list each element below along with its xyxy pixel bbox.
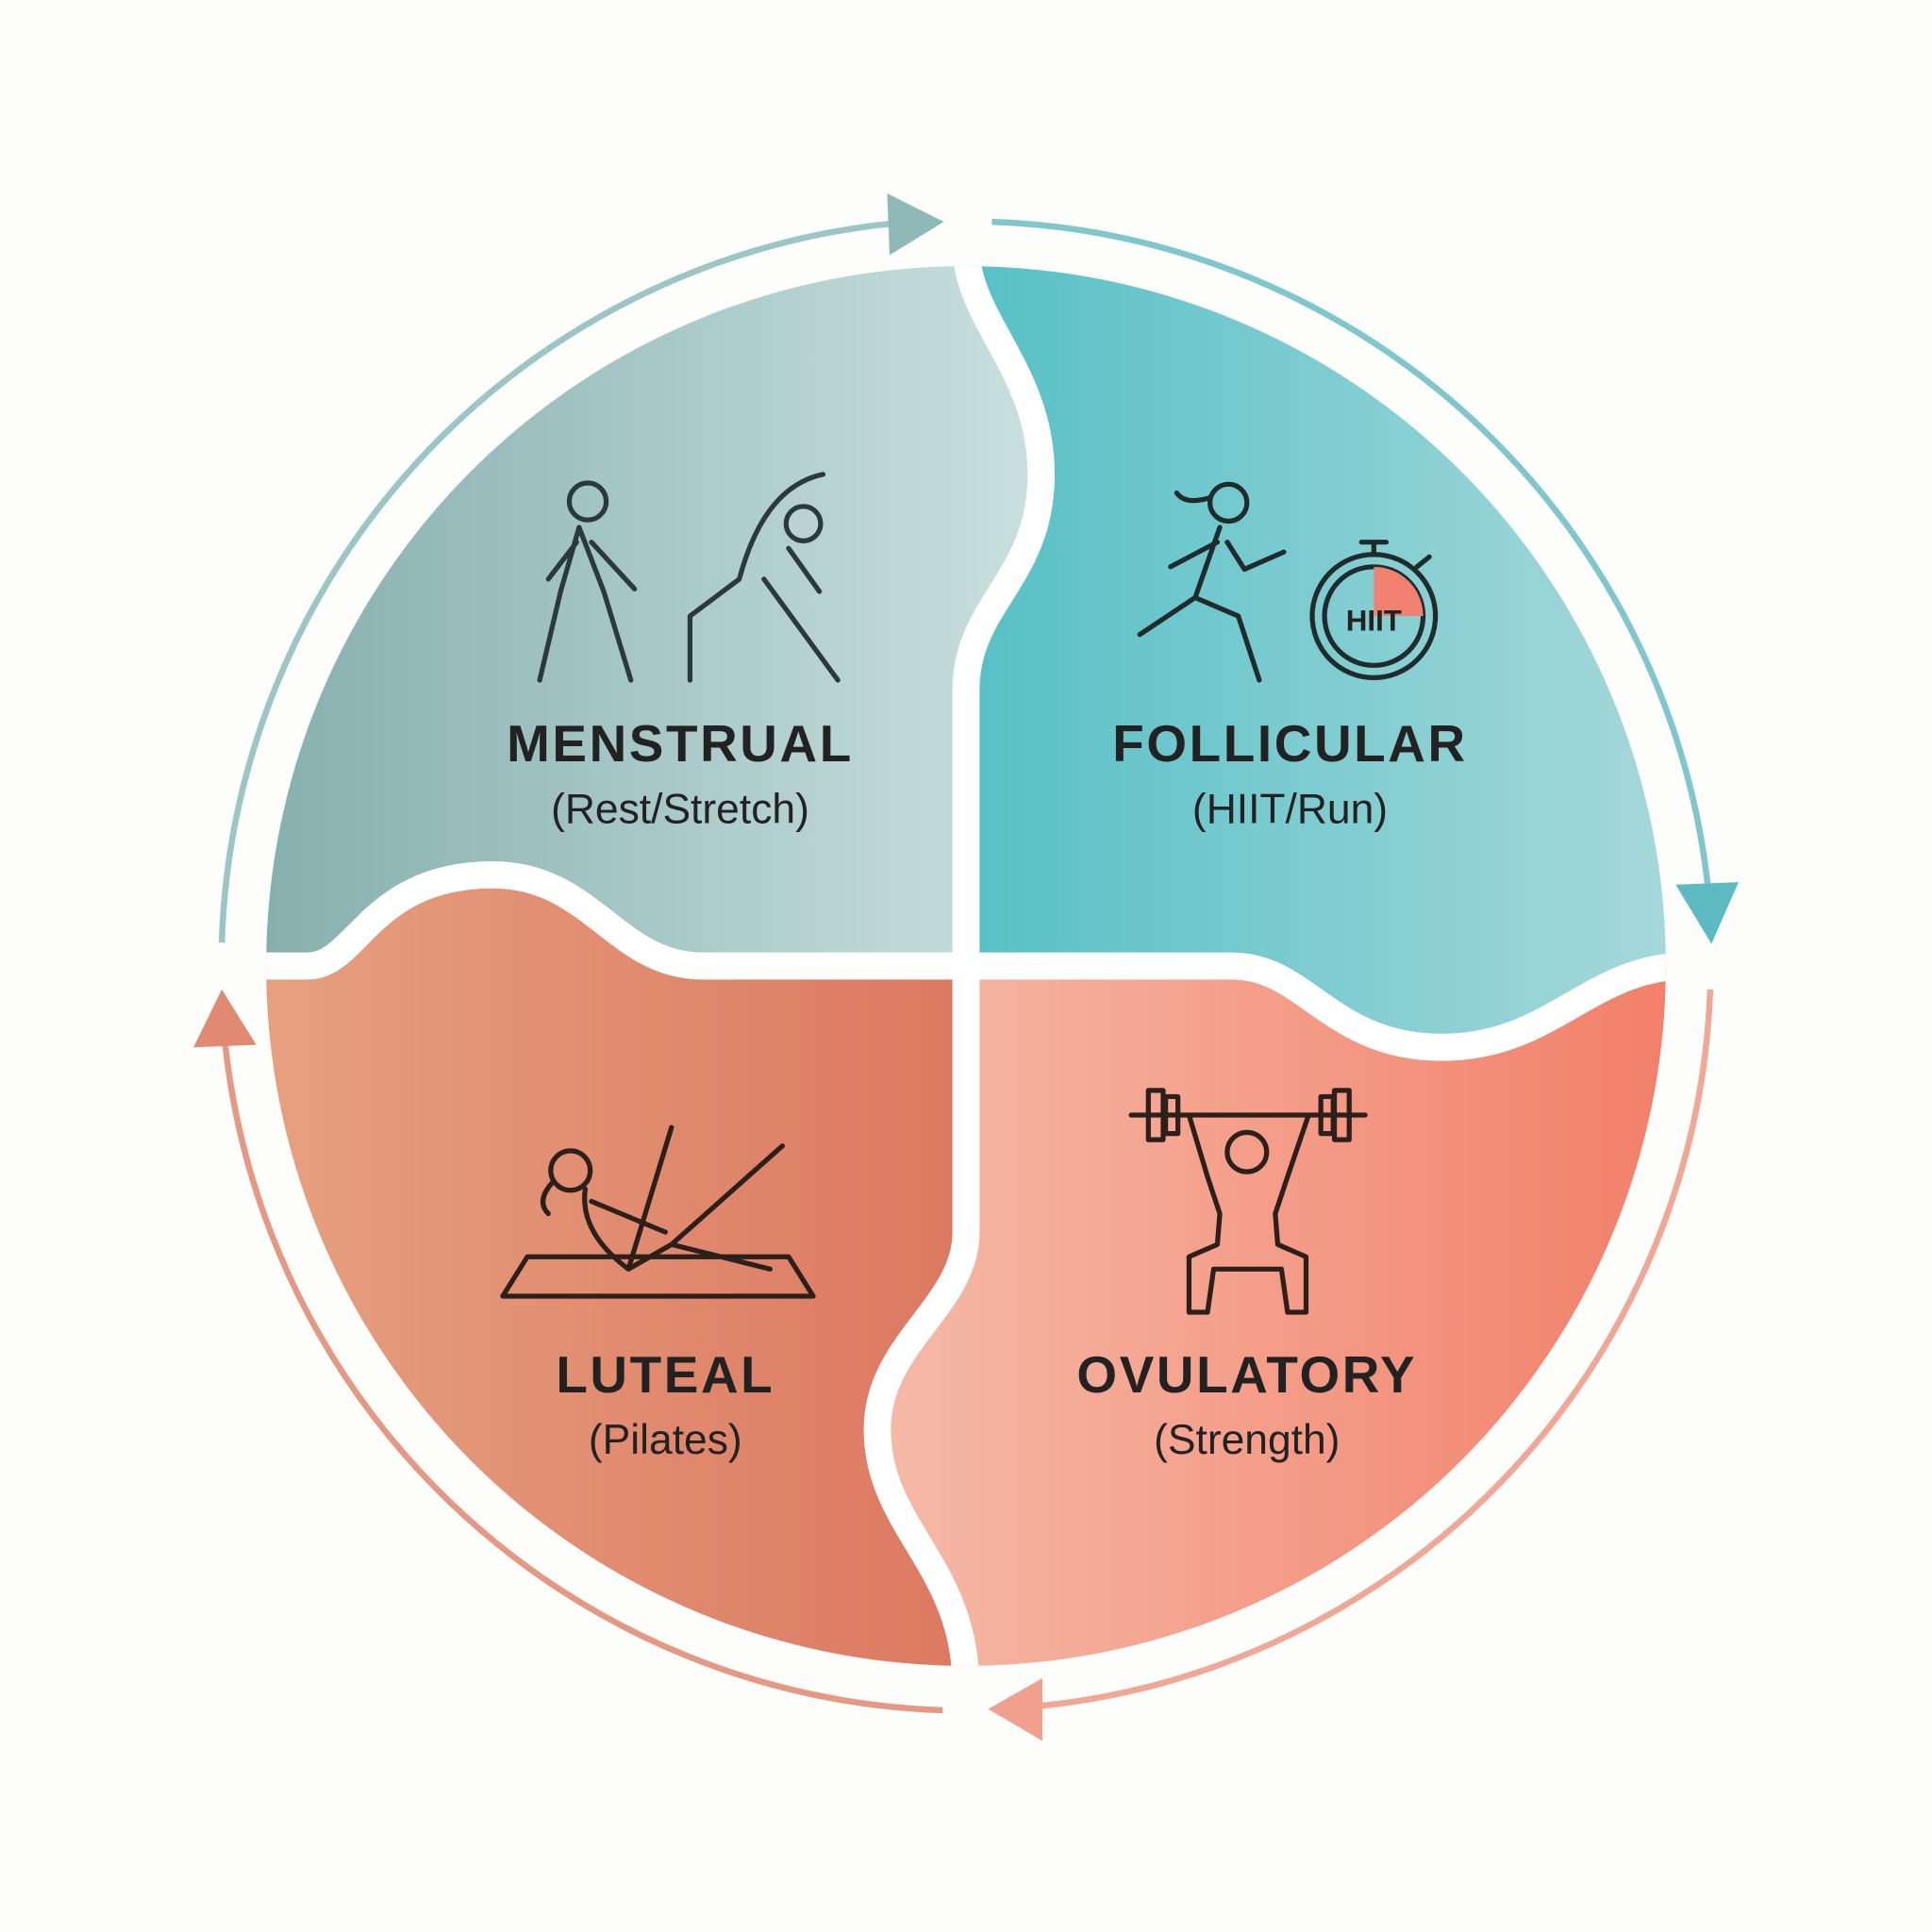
label: ovulatory: (Strength) xyxy=(1154,1417,1340,1463)
label: menstrual: MENSTRUAL xyxy=(507,714,854,773)
label: luteal xyxy=(556,1345,774,1463)
arrow: luteal to menstrual xyxy=(193,990,942,1710)
icon: runner and HIIT stopwatch: HIIT xyxy=(1346,605,1402,638)
cycle wheel xyxy=(246,246,1688,1688)
icon: weightlifter xyxy=(1131,1091,1365,1312)
panel: menstrual xyxy=(246,246,1041,966)
arrow: follicular to ovulatory xyxy=(991,222,1739,943)
label: ovulatory: OVULATORY xyxy=(1076,1345,1417,1404)
label: luteal: (Pilates) xyxy=(589,1417,742,1463)
panel: follicular xyxy=(966,246,1688,1047)
arrow: ovulatory to luteal xyxy=(989,990,1710,1741)
icon: walking and stretching xyxy=(540,475,838,680)
icon: runner and HIIT stopwatch xyxy=(1140,484,1436,680)
label: luteal: LUTEAL xyxy=(556,1345,774,1404)
arrow: menstrual to follicular xyxy=(222,193,943,942)
panel: luteal xyxy=(246,874,966,1688)
panel: ovulatory xyxy=(877,966,1688,1688)
label: follicular xyxy=(1112,714,1468,832)
label: menstrual: (Rest/Stretch) xyxy=(551,786,809,832)
label: follicular: FOLLICULAR xyxy=(1112,714,1468,773)
label: menstrual xyxy=(507,714,854,832)
label: follicular: (HIIT/Run) xyxy=(1192,786,1388,832)
label: ovulatory xyxy=(1076,1345,1417,1463)
icon: pilates xyxy=(503,1127,813,1296)
